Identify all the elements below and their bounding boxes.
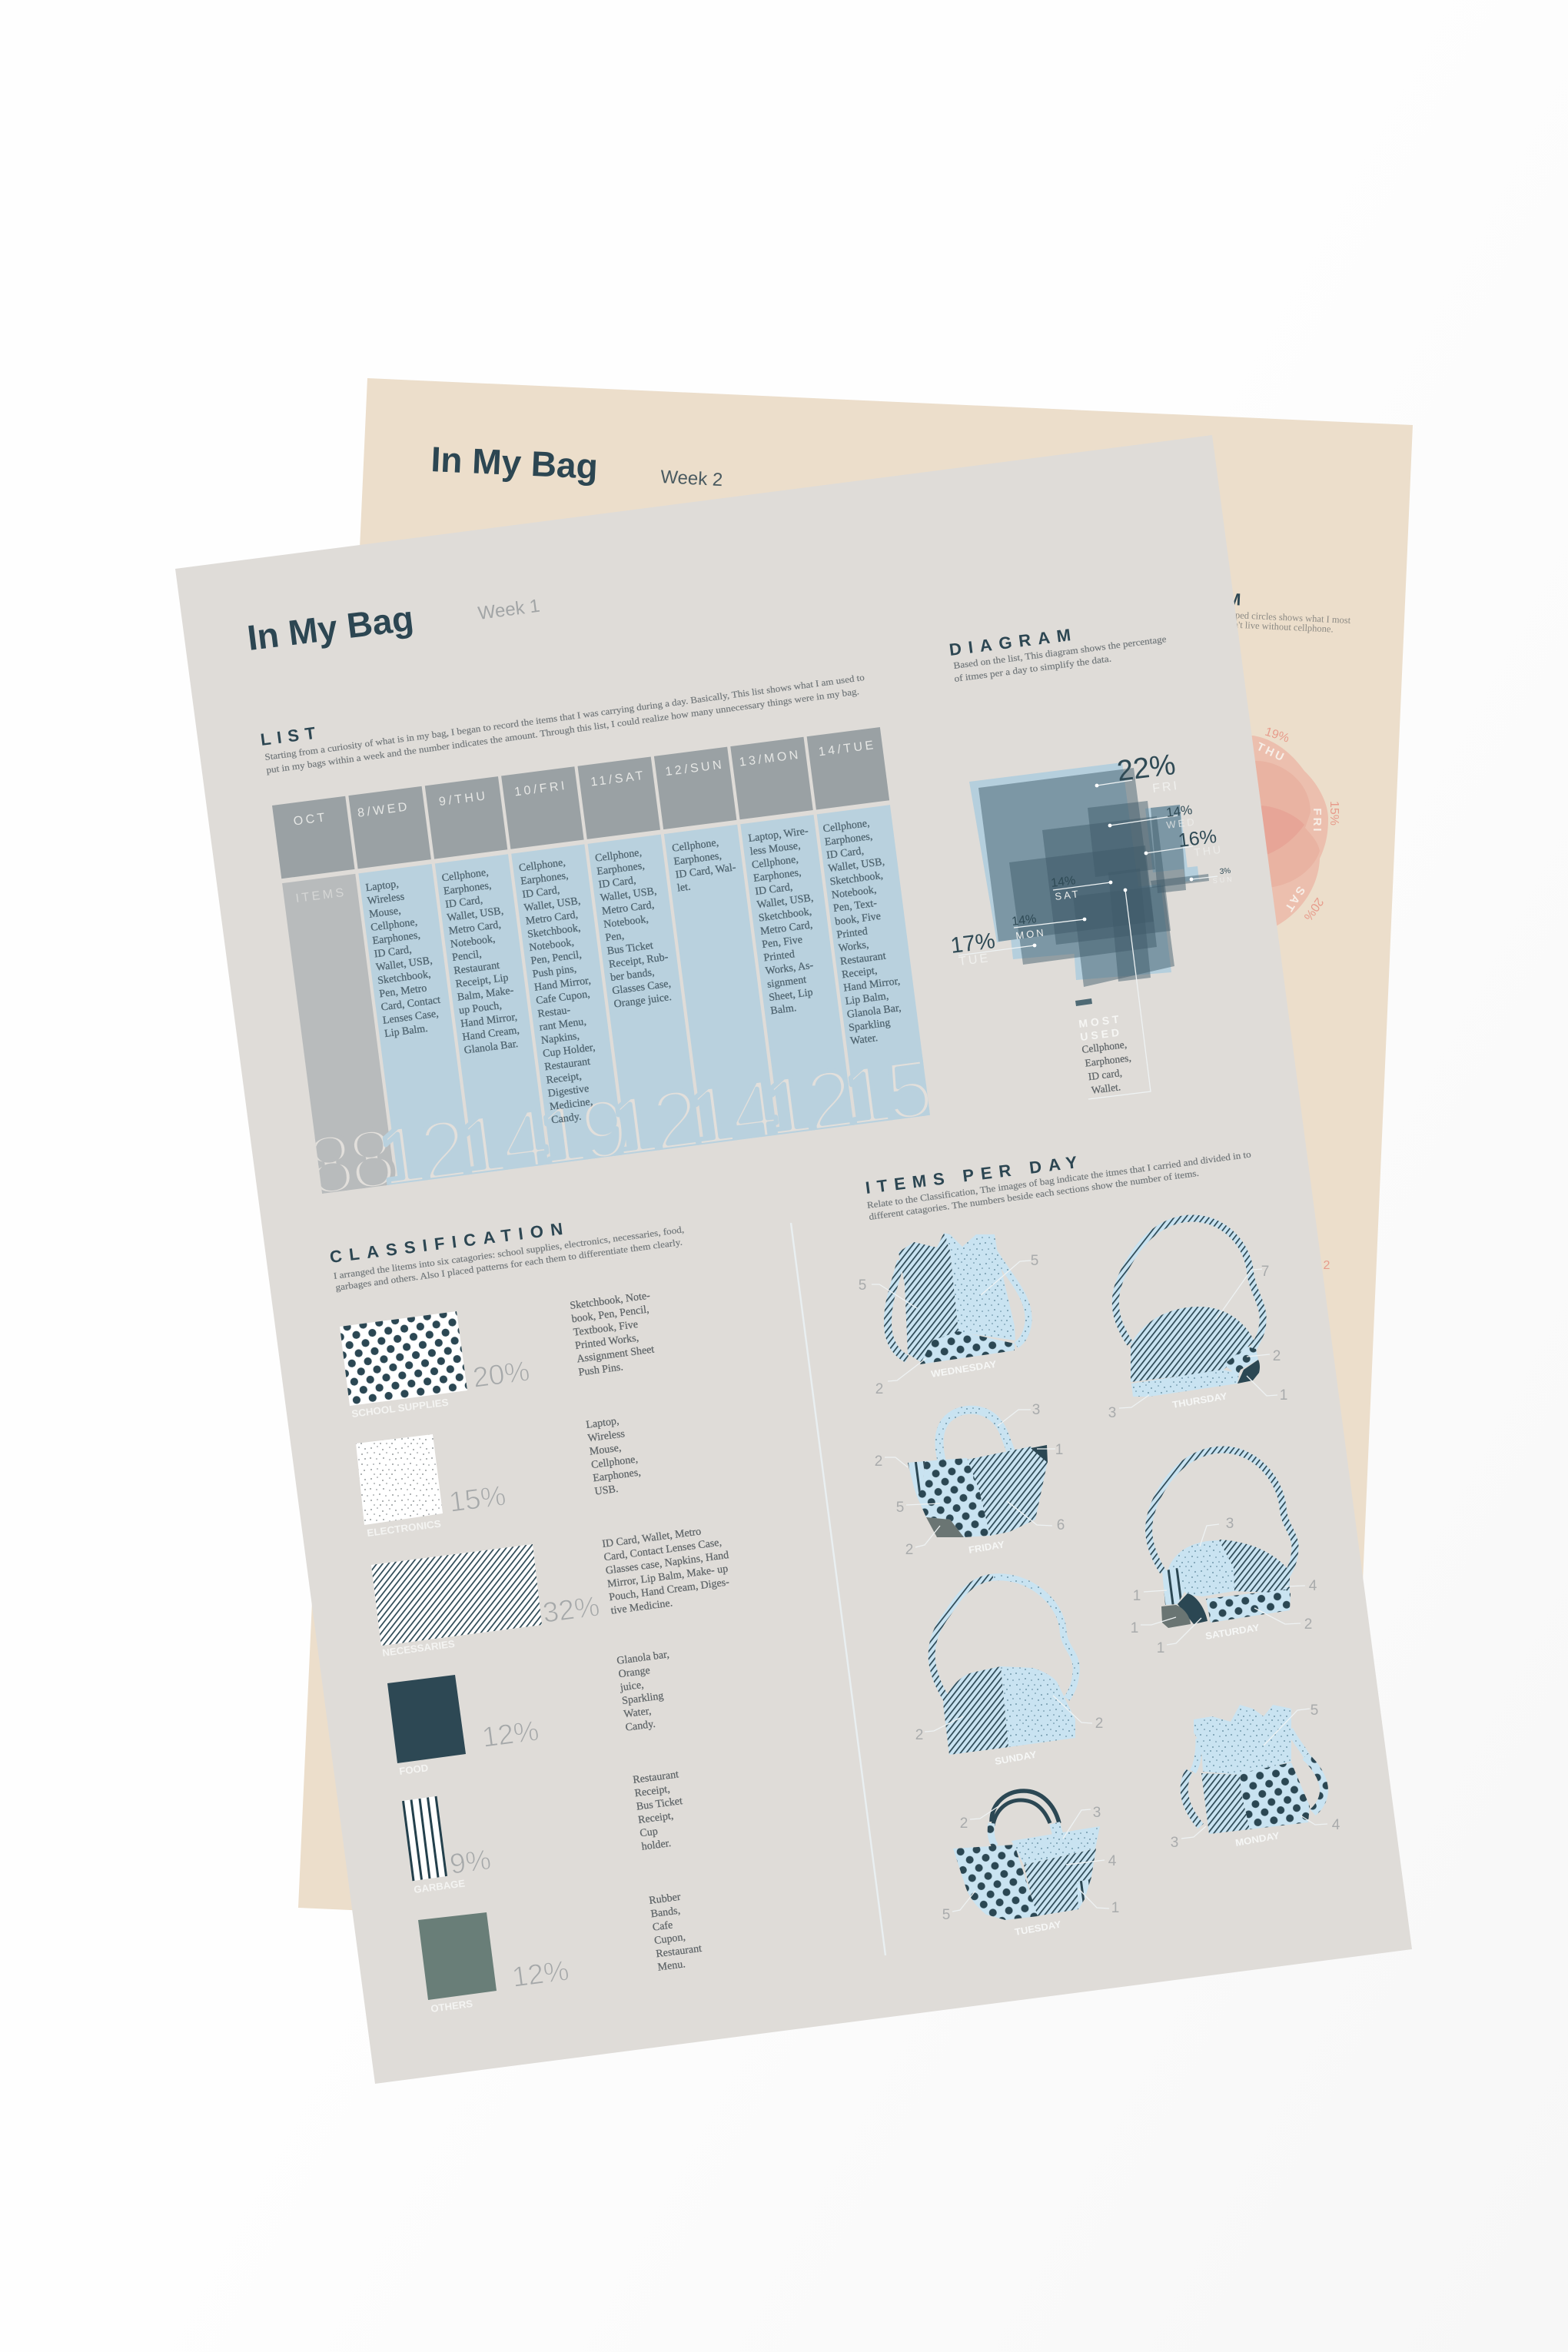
tue items: Restaurant bbox=[839, 951, 887, 968]
table header row: OCT bbox=[293, 811, 328, 829]
poster mockup canvas bbox=[175, 378, 1413, 2084]
fri items: Restau- bbox=[537, 1005, 571, 1020]
value: thu: THU bbox=[1193, 842, 1224, 859]
value: thu: 16% bbox=[1177, 826, 1218, 852]
bag: friday: 5 bbox=[896, 1500, 904, 1516]
panel: front sheet week 1 bbox=[175, 435, 1412, 2084]
fri items: Napkins, bbox=[540, 1031, 580, 1047]
value: sun: SUN bbox=[1212, 875, 1234, 885]
bag: thursday: 2 bbox=[1273, 1348, 1281, 1364]
value: sat: 14% bbox=[1050, 874, 1076, 890]
value: fri: FRI bbox=[1151, 779, 1180, 796]
bag: tuesday: 4 bbox=[1108, 1853, 1117, 1869]
bag: wednesday: 5 bbox=[859, 1277, 866, 1294]
bag: wednesday: 2 bbox=[875, 1381, 883, 1397]
value: wed bbox=[1108, 802, 1197, 831]
tue items: Sketchbook, bbox=[829, 870, 884, 889]
thu items: Hand Mirror, bbox=[460, 1012, 518, 1030]
tue items: Lip Balm, bbox=[845, 991, 889, 1008]
chart: overlapping circles: FRI bbox=[1311, 808, 1324, 834]
heading: items per day: ITEMS PER DAY bbox=[865, 1151, 1085, 1198]
value: sat: SAT bbox=[1055, 888, 1081, 902]
bag: monday: 4 bbox=[1332, 1817, 1340, 1833]
sat items: Bus Ticket bbox=[606, 940, 654, 958]
fri items: Metro Card, bbox=[525, 909, 579, 928]
daily totals: 15 bbox=[839, 1041, 935, 1144]
chart: overlapping circles: SAT bbox=[1281, 884, 1307, 915]
mon items: ID Card, bbox=[755, 882, 793, 898]
number: back sheet fragment: 2 bbox=[1324, 1259, 1330, 1272]
text block: list intro: Starting from a curiosity of what is in my bag, I began to record the items that I was carrying during a day. Basically, This list shows what I am used to bbox=[264, 672, 865, 762]
mon items: Printed bbox=[763, 948, 796, 964]
text block: diagram intro: Based on the list, This diagram shows the percentage bbox=[953, 633, 1167, 671]
bag: sunday bbox=[915, 1577, 1103, 1767]
value: sun: 3% bbox=[1219, 867, 1231, 876]
sat items: ber bands, bbox=[610, 967, 655, 984]
callout: most used: USED bbox=[1079, 1025, 1123, 1043]
sat items: ID Card, bbox=[598, 875, 636, 891]
category: electronics: ELECTRONICS bbox=[366, 1518, 442, 1539]
bag: friday: FRIDAY bbox=[968, 1539, 1006, 1556]
bag: thursday: THURSDAY bbox=[1171, 1390, 1228, 1410]
category: necessaries: tive Medicine. bbox=[610, 1597, 673, 1617]
tue items: Pen, Text- bbox=[832, 898, 878, 915]
daily totals: 12 bbox=[374, 1101, 469, 1204]
bag: saturday: 2 bbox=[1304, 1616, 1312, 1633]
fri items: Cafe Cupon, bbox=[535, 988, 591, 1007]
wed items: Lip Balm. bbox=[384, 1023, 429, 1040]
mon items: signment bbox=[766, 974, 807, 991]
category: necessaries: Glasses case, Napkins, Hand bbox=[605, 1550, 729, 1577]
sat items: Pen, bbox=[605, 930, 625, 944]
value: wed: 14% bbox=[1165, 802, 1193, 820]
category: garbage bbox=[402, 1769, 689, 1895]
text block: back sheet diagram: can't live without cellphone. bbox=[1224, 619, 1334, 634]
text block: back sheet diagram: Overlapped circles shows what I most bbox=[1204, 608, 1350, 626]
thu items: Earphones, bbox=[443, 880, 492, 898]
value: thu bbox=[1144, 826, 1224, 859]
bag: thursday: 7 bbox=[1261, 1264, 1269, 1280]
bag: thursday bbox=[1108, 1218, 1287, 1421]
sat items: Notebook, bbox=[603, 914, 649, 931]
value: tue: 17% bbox=[949, 929, 996, 958]
sat items: Glasses Case, bbox=[612, 978, 672, 997]
category: food: Candy. bbox=[625, 1719, 656, 1734]
tue items: Printed bbox=[836, 925, 869, 942]
tue items: ID Card, bbox=[826, 845, 865, 862]
daily totals: 12 bbox=[760, 1051, 855, 1154]
category: food: FOOD bbox=[398, 1762, 429, 1777]
tue items: Glanola Bar, bbox=[846, 1002, 902, 1021]
wed items: Sketchbook, bbox=[377, 968, 431, 987]
mon items: Metro Card, bbox=[759, 919, 813, 938]
thu items: Balm, Make- bbox=[457, 985, 515, 1004]
value: tue bbox=[949, 929, 1036, 968]
thu items: Hand Cream, bbox=[462, 1025, 520, 1044]
sun items: let. bbox=[676, 881, 691, 895]
thu items: Glanola Bar. bbox=[463, 1038, 519, 1057]
category: others bbox=[418, 1889, 704, 2015]
mon items: Sketchbook, bbox=[758, 906, 812, 925]
value: fri: 22% bbox=[1115, 749, 1178, 788]
bag: saturday: 1 bbox=[1131, 1620, 1138, 1636]
category: garbage: holder. bbox=[641, 1838, 672, 1853]
fri items: Restaurant bbox=[544, 1056, 591, 1073]
daily totals: 88 bbox=[302, 1110, 397, 1213]
table header row: 10/FRI bbox=[513, 779, 568, 799]
fri items: Cellphone, bbox=[518, 857, 566, 875]
table body columns bbox=[282, 805, 930, 1194]
tue items: Cellphone, bbox=[822, 818, 870, 835]
category: electronics: Mouse, bbox=[589, 1442, 622, 1458]
category: school supplies: Printed Works, bbox=[574, 1332, 639, 1352]
bag: saturday bbox=[1131, 1450, 1317, 1656]
text block: classification intro: I arranged the litems into six catagories: school supplies, electronics, necessaries, food, bbox=[333, 1224, 685, 1281]
table header row: 13/MON bbox=[739, 749, 802, 769]
sat items: Orange juice. bbox=[613, 992, 673, 1011]
bag: tuesday: 2 bbox=[960, 1815, 968, 1832]
daily totals: 14 bbox=[684, 1061, 780, 1164]
daily totals: 19 bbox=[534, 1080, 630, 1183]
value: tue: TUE bbox=[958, 952, 991, 968]
thu items: Wallet, USB, bbox=[447, 905, 504, 924]
category: necessaries: Pouch, Hand Cream, Diges- bbox=[609, 1576, 730, 1603]
wed items: Cellphone, bbox=[370, 916, 418, 934]
mon items: Cellphone, bbox=[751, 854, 799, 872]
callout: most used: Earphones, bbox=[1085, 1051, 1131, 1069]
tue items: Works, bbox=[838, 939, 869, 955]
bag: tuesday: 5 bbox=[942, 1907, 950, 1923]
mon items: less Mouse, bbox=[749, 840, 801, 858]
bag: thursday: 3 bbox=[1108, 1405, 1116, 1421]
category: necessaries: Card, Contact Lenses Case, bbox=[603, 1537, 723, 1563]
thu items: Metro Card, bbox=[448, 919, 502, 937]
bag: monday: MONDAY bbox=[1234, 1830, 1281, 1849]
category: others: Restaurant bbox=[656, 1943, 703, 1960]
wed items: ID Card, bbox=[374, 944, 412, 961]
heading: classification: CLASSIFICATION bbox=[329, 1218, 571, 1267]
mon items: Pen, Five bbox=[762, 934, 803, 951]
wed items: Card, Contact bbox=[380, 995, 441, 1014]
bag: friday bbox=[875, 1402, 1065, 1558]
category: school supplies: 20% bbox=[471, 1355, 531, 1394]
fri items: Digestive bbox=[547, 1083, 590, 1100]
category: electronics: USB. bbox=[594, 1483, 619, 1498]
mon items: Earphones, bbox=[752, 867, 802, 885]
tue items: book, Five bbox=[834, 911, 882, 928]
sun items: ID Card, Wal- bbox=[675, 862, 737, 881]
title: week 2: In My Bag bbox=[430, 439, 599, 487]
category: others: Menu. bbox=[657, 1958, 686, 1974]
callout: most used: Cellphone, bbox=[1081, 1038, 1128, 1055]
value: mon: MON bbox=[1015, 926, 1046, 942]
value: fri bbox=[1095, 749, 1180, 796]
category: necessaries: NECESSARIES bbox=[381, 1638, 456, 1659]
value: wed: WED bbox=[1166, 816, 1197, 831]
wed items: Mouse, bbox=[368, 905, 401, 921]
category: food: 12% bbox=[480, 1715, 540, 1753]
category: garbage: Cup bbox=[639, 1826, 659, 1839]
wed items: Wallet, USB, bbox=[375, 955, 433, 974]
table header row: 11/SAT bbox=[590, 769, 646, 789]
thu items: ID Card, bbox=[444, 895, 483, 911]
text block: diagram intro: of itmes per a day to simplify the data. bbox=[954, 653, 1112, 684]
category: necessaries: Mirror, Lip Balm, Make- up bbox=[606, 1563, 729, 1590]
value: mon bbox=[1011, 912, 1086, 942]
bag: monday: 5 bbox=[1311, 1703, 1318, 1719]
bag: wednesday: WEDNESDAY bbox=[930, 1359, 998, 1380]
mon items: Balm. bbox=[770, 1002, 797, 1017]
bag: sunday: 2 bbox=[1095, 1716, 1103, 1732]
tue items: Receipt, bbox=[841, 965, 878, 981]
bag: saturday: 1 bbox=[1157, 1640, 1164, 1656]
text block: items per day intro: different catagories. The numbers beside each sections show the number of items. bbox=[869, 1168, 1200, 1222]
category: garbage: Restaurant bbox=[633, 1769, 679, 1786]
table header row bbox=[272, 727, 889, 879]
fri items: Medicine, bbox=[549, 1096, 593, 1113]
value: mon: 14% bbox=[1011, 912, 1037, 929]
sun items: Earphones, bbox=[673, 850, 723, 868]
category: food: Glanola bar, bbox=[616, 1649, 670, 1667]
text block: diagram intro bbox=[953, 633, 1167, 684]
fri items: Sketchbook, bbox=[527, 922, 581, 941]
sat items: Earphones, bbox=[596, 860, 646, 878]
daily totals bbox=[315, 1058, 930, 1194]
table header row: 14/TUE bbox=[818, 739, 877, 759]
daily totals: 12 bbox=[606, 1071, 701, 1174]
category: necessaries: ID Card, Wallet, Metro bbox=[602, 1526, 702, 1550]
category: food: Orange bbox=[618, 1665, 651, 1680]
callout: most used: Wallet. bbox=[1091, 1081, 1121, 1096]
wed items: Wireless bbox=[367, 891, 405, 908]
wed items: Pen, Metro bbox=[379, 982, 427, 1000]
category: others: 12% bbox=[510, 1955, 570, 1993]
bag: thursday: 1 bbox=[1280, 1387, 1287, 1404]
category: garbage: Bus Ticket bbox=[636, 1796, 683, 1813]
table header row: 9/THU bbox=[438, 789, 489, 809]
tue items: Sparkling bbox=[848, 1017, 891, 1034]
bag: wednesday: 5 bbox=[1031, 1253, 1038, 1269]
chart: overlapping circles bbox=[1222, 726, 1340, 930]
tue items: Hand Mirror, bbox=[843, 975, 901, 995]
category: food bbox=[387, 1649, 679, 1777]
bag: sunday: SUNDAY bbox=[994, 1749, 1038, 1767]
bag: sunday: 2 bbox=[915, 1727, 923, 1743]
category: school supplies: Textbook, Five bbox=[573, 1319, 639, 1339]
category: food: Water, bbox=[623, 1706, 652, 1720]
tue items: Notebook, bbox=[831, 884, 877, 902]
category: electronics: Earphones, bbox=[593, 1467, 642, 1484]
table header row: 12/SUN bbox=[665, 758, 725, 779]
chart: overlapping squares bbox=[949, 749, 1234, 987]
wed items: Earphones, bbox=[372, 929, 421, 947]
category: school supplies bbox=[340, 1291, 659, 1420]
mon items: Laptop, Wire- bbox=[748, 826, 809, 845]
tue items: Earphones, bbox=[824, 831, 873, 849]
bag: tuesday: 3 bbox=[1093, 1805, 1101, 1821]
category: necessaries bbox=[371, 1523, 735, 1659]
table header row: 8/WED bbox=[357, 800, 410, 820]
mon items: Works, As- bbox=[765, 960, 814, 978]
wed items: Lenses Case, bbox=[382, 1008, 440, 1027]
category: others: Cafe bbox=[652, 1919, 673, 1934]
panel: back sheet week 2 bbox=[298, 378, 1413, 1955]
fri items: Earphones, bbox=[520, 870, 569, 888]
category: others: Bands, bbox=[650, 1905, 681, 1920]
bag: friday: 2 bbox=[905, 1542, 913, 1558]
category: electronics: Cellphone, bbox=[590, 1453, 639, 1471]
bag: friday: 6 bbox=[1057, 1517, 1065, 1533]
subtitle: week 1: Week 1 bbox=[477, 596, 541, 624]
category: necessaries: 32% bbox=[541, 1590, 601, 1629]
sat items: Cellphone, bbox=[594, 847, 643, 865]
table body columns: ITEMS bbox=[295, 886, 347, 905]
fri items: Receipt, bbox=[546, 1071, 583, 1087]
heading: list: LIST bbox=[259, 723, 323, 749]
mon items: Wallet, USB, bbox=[756, 892, 814, 911]
bag: monday: 3 bbox=[1171, 1835, 1178, 1851]
category: electronics: 15% bbox=[447, 1480, 507, 1518]
callout: most used: ID card, bbox=[1088, 1067, 1123, 1082]
value: sun bbox=[1190, 867, 1234, 885]
category: electronics bbox=[356, 1414, 643, 1539]
divider line bbox=[791, 1223, 885, 1955]
text block: items per day intro: Relate to the Classification, The images of bag indicate the itmes that I carried and divided in to bbox=[866, 1148, 1251, 1211]
thu items: Restaurant bbox=[453, 960, 500, 977]
sat items: Metro Card, bbox=[601, 899, 655, 918]
bag: tuesday bbox=[942, 1791, 1119, 1938]
sun items: Cellphone, bbox=[672, 837, 719, 855]
category: electronics: Laptop, bbox=[586, 1416, 620, 1431]
text block: list intro: put in my bags within a week and the number indicates the amount. Through this list, I could realize how many unnecessary things were in my bag. bbox=[266, 686, 860, 776]
thu items: Cellphone, bbox=[441, 867, 489, 884]
fri items: rant Menu, bbox=[539, 1016, 587, 1034]
category: school supplies: SCHOOL SUPPLIES bbox=[351, 1397, 450, 1420]
category: garbage: Receipt, bbox=[634, 1783, 671, 1799]
category: others: Cupon, bbox=[653, 1932, 686, 1947]
category: garbage: GARBAGE bbox=[413, 1877, 466, 1895]
fri items: Wallet, USB, bbox=[523, 895, 581, 914]
thu items: Receipt, Lip bbox=[455, 972, 509, 991]
fri items: Notebook, bbox=[529, 937, 575, 954]
category: garbage: 9% bbox=[448, 1843, 493, 1880]
category: food: Sparkling bbox=[621, 1690, 664, 1707]
thu items: Pencil, bbox=[451, 948, 482, 964]
heading: back sheet diagram: DIAGRAM bbox=[1118, 584, 1248, 610]
bag: friday: 2 bbox=[875, 1453, 882, 1470]
value: sat bbox=[1050, 874, 1112, 902]
subtitle: week 2: Week 2 bbox=[660, 467, 723, 490]
text block: classification intro: garbages and others. Also I placed patterns for each them to differentiate them clearly. bbox=[335, 1237, 683, 1293]
category: others: Rubber bbox=[649, 1892, 682, 1907]
category: others: OTHERS bbox=[430, 1998, 473, 2015]
callout: most used bbox=[1075, 889, 1151, 1099]
sat items: Wallet, USB, bbox=[600, 885, 657, 905]
bag: monday bbox=[1171, 1703, 1340, 1851]
category: school supplies: book, Pen, Pencil, bbox=[571, 1304, 649, 1325]
bag: friday: 1 bbox=[1055, 1442, 1063, 1458]
thu items: Notebook, bbox=[450, 933, 496, 951]
fri items: Hand Mirror, bbox=[533, 975, 592, 994]
tue items: Wallet, USB, bbox=[828, 856, 885, 875]
wed items: Laptop, bbox=[365, 879, 400, 894]
category: school supplies: Assignment Sheet bbox=[576, 1344, 655, 1365]
callout: most used: MOST bbox=[1078, 1012, 1122, 1030]
fri items: Pen, Pencil, bbox=[530, 949, 583, 967]
fri items: Candy. bbox=[550, 1111, 582, 1126]
bag: saturday: SATURDAY bbox=[1204, 1622, 1261, 1642]
fri items: ID Card, bbox=[522, 885, 560, 901]
category: electronics: Wireless bbox=[587, 1428, 626, 1444]
bag: friday: 3 bbox=[1032, 1402, 1040, 1418]
bag: wednesday bbox=[859, 1233, 1038, 1397]
category: school supplies: Sketchbook, Note- bbox=[570, 1291, 651, 1312]
bag: tuesday: TUESDAY bbox=[1014, 1918, 1062, 1938]
bag: saturday: 1 bbox=[1133, 1588, 1141, 1604]
bag: saturday: 3 bbox=[1226, 1516, 1234, 1532]
title: week 1: In My Bag bbox=[245, 598, 416, 658]
chart: overlapping circles: 15% bbox=[1327, 801, 1340, 826]
mon items: Sheet, Lip bbox=[768, 987, 813, 1004]
category: school supplies: Push Pins. bbox=[578, 1361, 624, 1379]
chart: overlapping circles: THU bbox=[1254, 740, 1288, 765]
chart: overlapping circles: 20% bbox=[1301, 895, 1326, 923]
daily totals: 14 bbox=[454, 1091, 551, 1194]
fri items: Cup Holder, bbox=[542, 1041, 596, 1060]
tue items: Water. bbox=[850, 1032, 879, 1048]
sat items: Receipt, Rub- bbox=[608, 952, 669, 971]
bag: tuesday: 1 bbox=[1111, 1900, 1119, 1916]
heading: diagram: DIAGRAM bbox=[948, 624, 1078, 659]
category: garbage: Receipt, bbox=[637, 1810, 674, 1826]
thu items: up Pouch, bbox=[458, 1000, 503, 1017]
bag: saturday: 4 bbox=[1309, 1578, 1317, 1594]
chart: overlapping circles: 19% bbox=[1264, 726, 1291, 746]
fri items: Push pins, bbox=[532, 963, 577, 981]
table: list of items per day bbox=[261, 727, 935, 1213]
category: food: juice, bbox=[619, 1679, 644, 1694]
